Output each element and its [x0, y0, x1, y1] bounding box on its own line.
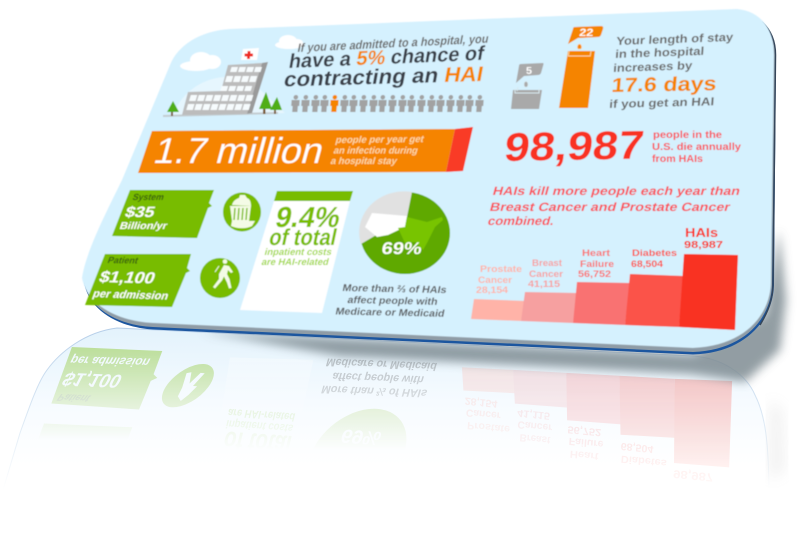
- stat: 98,987 deaths: 98,987: [502, 123, 646, 170]
- bar: heart failure: Failure: [580, 259, 614, 269]
- grey bar: 5 days: [511, 63, 544, 109]
- length of stay text: 17.6 days: [611, 73, 717, 97]
- caption: Medicare or Medicaid: Medicare or Medicaid: [334, 307, 446, 320]
- reflection: left cost boxes: Patient: [55, 391, 94, 404]
- reflection: left cost boxes: $1,100: [59, 368, 126, 390]
- bar: diabetes: 68,504: [631, 259, 663, 269]
- length of stay text: if you get an HAI: [609, 96, 715, 111]
- stat: 98,987 deaths: [502, 123, 741, 170]
- reflection: left cost boxes: [41, 347, 214, 432]
- card rim: dark blue edge: [84, 15, 776, 354]
- reflection: bar chart: Cancer: [517, 418, 553, 433]
- card drop shadow: [200, 230, 786, 382]
- reflection: cost panel, pie and caption: affect people with: [331, 370, 425, 386]
- length of stay text: increases by: [613, 60, 693, 75]
- reflection: bar chart: [462, 367, 732, 482]
- bar: HAIs: [679, 225, 738, 330]
- bar: diabetes: Diabetes: [632, 248, 677, 258]
- bar: heart failure: [573, 248, 630, 325]
- comparison text: combined.: [486, 214, 556, 228]
- panel: 9.4% of inpatient costs: of total: [267, 224, 339, 250]
- pie chart: 69% Medicare or Medicaid: [359, 191, 450, 274]
- reflection: cost panel, pie and caption: Medicare or Medicaid: [325, 355, 439, 372]
- banner: 1.7 million: people per year get: [334, 134, 426, 146]
- reflection: bar chart: 56,752: [567, 423, 602, 438]
- bar chart: deaths by cause: [471, 225, 738, 330]
- caption: Medicare or Medicaid: More than ⅔ of HAIs: [341, 283, 448, 296]
- bar: prostate cancer: Prostate: [480, 264, 522, 274]
- banner: 1.7 million: [138, 127, 473, 173]
- caption: Medicare or Medicaid: affect people with: [346, 295, 439, 308]
- reflection: bar chart: 41,115: [517, 406, 551, 421]
- bar: diabetes: [625, 248, 684, 327]
- comparison text: Breast Cancer and Prostate Cancer: [488, 200, 732, 214]
- callout: patient cost: [85, 254, 191, 307]
- callout: system cost: Billion/yr: [118, 221, 169, 232]
- reflection: bar chart: Breast: [519, 431, 551, 446]
- reflection: bar chart: 28,154: [464, 394, 498, 409]
- icon: capitol building: [223, 192, 261, 232]
- bar: breast cancer: 41,115: [528, 279, 560, 289]
- cloud upper: [275, 35, 303, 49]
- callout: patient cost: Patient: [106, 255, 140, 265]
- banner: 1.7 million: an infection during: [332, 146, 419, 156]
- callout: system cost: [112, 190, 214, 238]
- stat: 98,987 deaths: U.S. die annually: [652, 142, 741, 153]
- reflection: cost panel, pie and caption: are HAI-related: [227, 406, 297, 423]
- bar: heart failure: 56,752: [578, 269, 611, 279]
- comparison text: [486, 184, 742, 228]
- bar: prostate cancer: 28,154: [476, 285, 508, 295]
- banner: 1.7 million: 1.7 million: [150, 131, 329, 171]
- callout: patient cost: per admission: [91, 288, 170, 303]
- reflection: card outline: [0, 328, 769, 544]
- reflection: bar chart: 68,504: [620, 440, 654, 455]
- trees: [167, 92, 282, 116]
- reflection: cost panel, pie and caption: [225, 358, 437, 440]
- reflection: cost panel, pie and caption: inpatient costs: [225, 417, 295, 434]
- panel: 9.4% of inpatient costs: are HAI-related: [260, 257, 330, 268]
- comparison text: HAIs kill more people each year than: [491, 184, 742, 198]
- pie chart: 69% Medicare or Medicaid: 69%: [380, 239, 423, 258]
- reflection: left cost boxes: per admission: [67, 353, 153, 369]
- card surface: [82, 9, 774, 348]
- headline: If you are admitted to a hospital, you: [296, 32, 490, 55]
- stat: 98,987 deaths: from HAIs: [652, 154, 703, 165]
- headline: [282, 32, 490, 91]
- hospital flag with red cross: [241, 48, 259, 60]
- card surface with infographic content: [82, 9, 774, 348]
- hospital illustration: [163, 35, 303, 117]
- bar: breast cancer: Cancer: [529, 269, 564, 279]
- reflection side shadow: [770, 400, 784, 480]
- bar: breast cancer: [521, 258, 577, 323]
- grey bar: 5 days: 5: [526, 66, 532, 77]
- panel: 9.4% of inpatient costs: 9.4%: [273, 201, 343, 234]
- panel: 9.4% of inpatient costs: inpatient costs: [263, 247, 333, 258]
- bar: HAIs: 98,987: [684, 240, 724, 251]
- reflection: bar chart: Heart: [570, 447, 600, 462]
- card rim: grey bevel: [84, 14, 775, 352]
- length of stay text: Your length of stay: [616, 32, 734, 48]
- orange bar: 22 days: [559, 26, 603, 108]
- panel: 9.4% of inpatient costs: [240, 191, 353, 313]
- length of stay text: in the hospital: [615, 46, 705, 61]
- stat: 98,987 deaths: people in the: [653, 130, 722, 141]
- cloud: [180, 52, 221, 71]
- callout: system cost: $35: [123, 204, 158, 221]
- reflection: cost panel, pie and caption: of total: [220, 425, 295, 461]
- bar: heart failure: Heart: [582, 248, 610, 258]
- bar: breast cancer: Breast: [532, 258, 562, 268]
- reflection: bar chart: Prostate: [467, 419, 511, 435]
- headline: have a 5% chance of: [287, 43, 486, 73]
- reflection: cost panel, pie and caption: 69%: [338, 425, 384, 450]
- length of stay bars: [511, 26, 734, 111]
- reflection: bar chart: Diabetes: [621, 452, 668, 469]
- bar: HAIs: HAIs: [685, 225, 718, 240]
- callout: system cost: System: [131, 192, 166, 202]
- reflection: bar chart: 98,987: [673, 467, 714, 483]
- reflection: cost panel, pie and caption: More than ⅔ of HAIs: [320, 383, 429, 399]
- banner: 1.7 million: a hospital stay: [329, 156, 399, 167]
- reflection: bar chart: Failure: [568, 435, 604, 450]
- caption: Medicare or Medicaid: [334, 283, 448, 320]
- headline: contracting an HAI: [282, 63, 485, 91]
- length of stay text: [609, 32, 734, 111]
- people row: 1 of 20 highlighted: [291, 95, 484, 112]
- orange bar: 22 days: 22: [579, 27, 594, 39]
- bar: prostate cancer: [471, 264, 525, 321]
- icon: walking patient: [200, 258, 240, 298]
- bar: prostate cancer: Cancer: [478, 275, 513, 285]
- reflection: bar chart: Cancer: [466, 406, 501, 421]
- callout: patient cost: $1,100: [97, 268, 158, 287]
- card right edge: [760, 22, 776, 325]
